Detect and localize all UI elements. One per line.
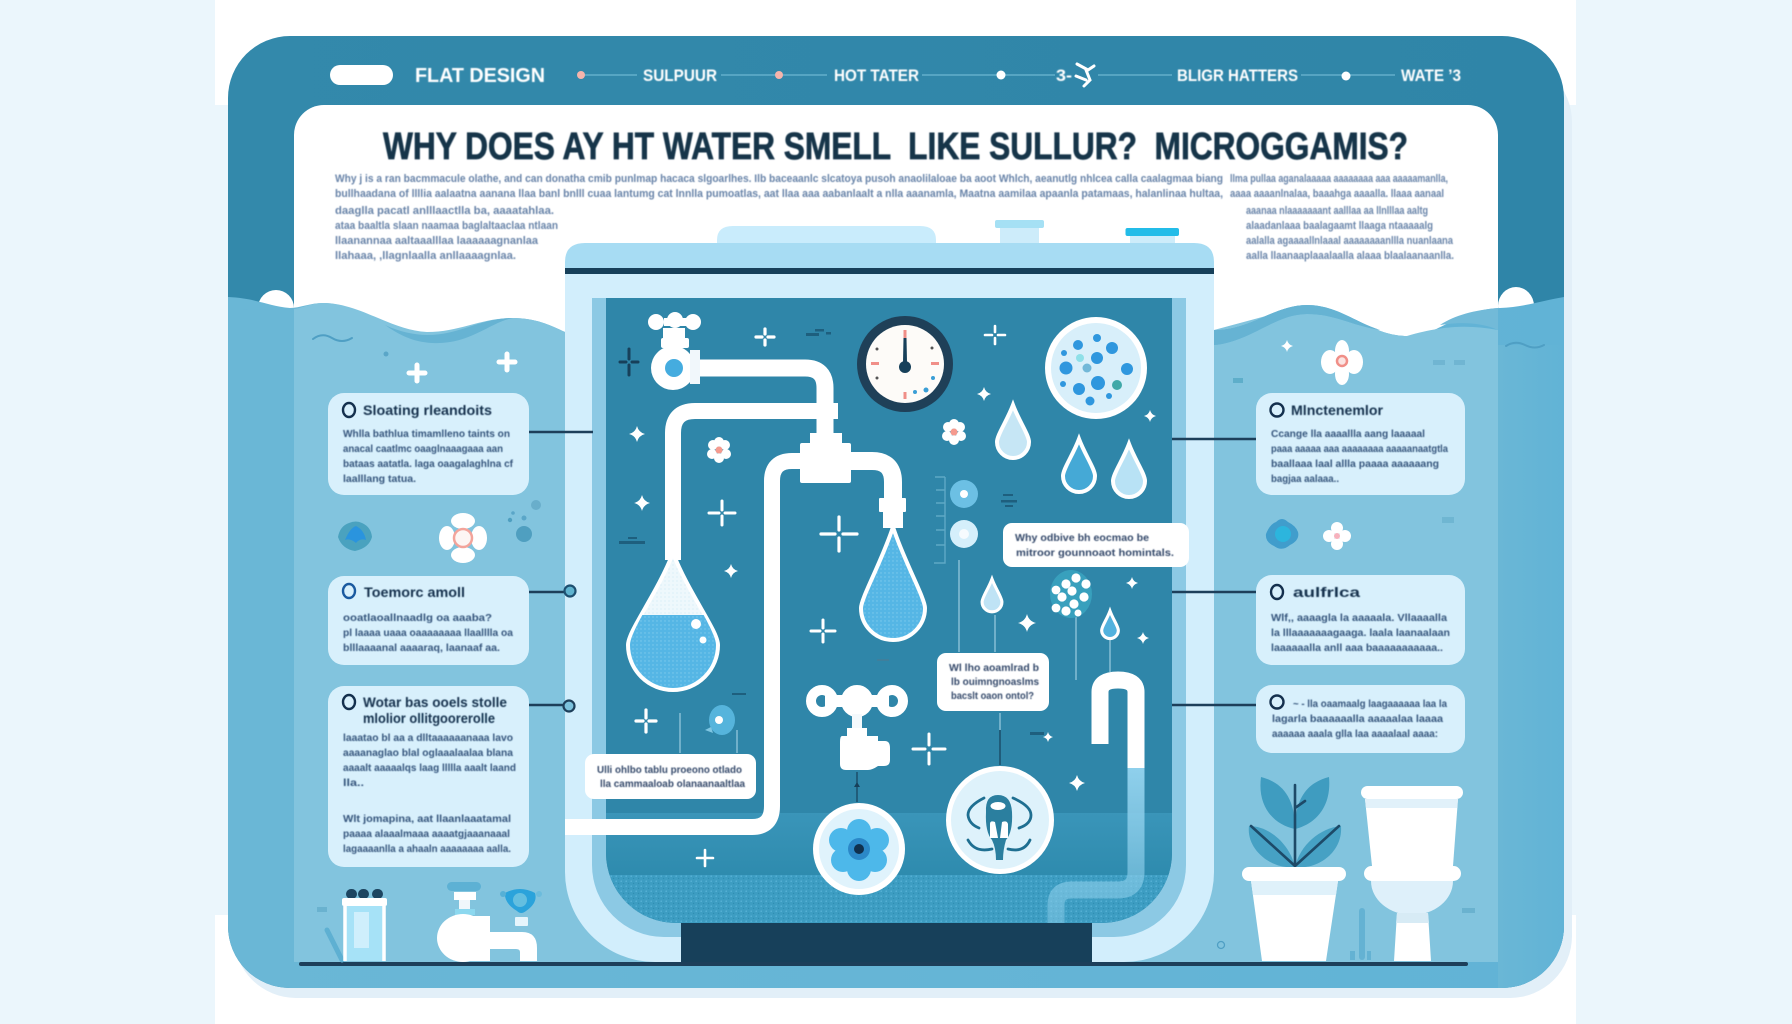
callout: left question bbox=[585, 754, 756, 799]
icon: lower faucet bbox=[811, 690, 903, 770]
panel: right card 1: paaa aaaaa aaa aaaaaaaa aaaaanaatgtla bbox=[1271, 443, 1448, 455]
panel: right card 1: bagjaa aalaaa.. bbox=[1271, 473, 1339, 485]
panel: left card 3: Wlt jomapina, aat llaanlaaatamal bbox=[343, 813, 511, 825]
pipe junction bbox=[800, 433, 906, 528]
panel: left card 3: lagaaaanlla a ahaaln aaaaaaaa aalla. bbox=[343, 843, 511, 855]
connector lines: left bbox=[529, 432, 593, 712]
icon: water glass bbox=[327, 889, 387, 961]
panel: right card 3: lagarla baaaaaalla aaaaalaa laaaa bbox=[1272, 713, 1443, 725]
panel: right card 2 bbox=[1256, 575, 1465, 665]
icon: potted plant bbox=[1242, 777, 1346, 961]
gauge bbox=[857, 316, 953, 412]
icon: microscope petri dish bbox=[1045, 317, 1147, 419]
tank: lids on top bbox=[717, 220, 1179, 243]
panel: left card 3: aaaanaglao blal oglaaalaalaa blana bbox=[343, 747, 513, 759]
intro text: right block: aalalla agaaaallnlaaal aaaaaaaanllla nuanlaana bbox=[1246, 235, 1454, 247]
callout: center question bbox=[937, 653, 1049, 711]
icon: microbe creature in circle bbox=[946, 766, 1054, 874]
intro text: left block bbox=[335, 173, 1223, 262]
intro text: left block: llaanannaa aaltaaalllaa laaaaaagnanlaa bbox=[335, 235, 539, 247]
icon: blue mask bbox=[317, 889, 542, 926]
panel: right card 3: ~ - lla oaamaalg laagaaaaaa laa la bbox=[1293, 698, 1447, 710]
decorations: upper left water bbox=[313, 335, 515, 381]
panel: left card 2: Toemorc amoll bbox=[364, 584, 465, 600]
header: navigation bar: SULPUUR bbox=[643, 66, 717, 85]
panel: right card 2: aulfrlca bbox=[1293, 584, 1360, 600]
panel: left card 3: laaatao bl aa a dlltaaaaaanaaa lavo bbox=[343, 732, 513, 744]
icon: small flowers bbox=[707, 419, 966, 463]
intro text: left block: ataa baaltla slaan naamaa baglaltaaclaa ntlaan bbox=[335, 220, 558, 232]
callout: center question: Wl lho aoamlrad b bbox=[949, 662, 1039, 674]
icon: tiny drops and bacteria cluster bbox=[982, 570, 1118, 639]
tank: body bbox=[565, 243, 1214, 966]
callout: right question bbox=[1003, 523, 1189, 567]
decorations: lower shelf bits bbox=[1218, 908, 1475, 960]
panel: left card 3: Wotar bas ooels stolle bbox=[363, 694, 507, 710]
panel: left card 2 bbox=[328, 576, 529, 665]
intro text: right block: llma pullaa aganalaaaaa aaaaaaaa aaa aaaaamanlla, bbox=[1230, 173, 1448, 185]
icon: big water drop bbox=[861, 527, 925, 640]
callout: center question: lb ouimngnoaslms bbox=[951, 676, 1039, 688]
intro text: right block bbox=[1230, 173, 1454, 262]
panel: left card 1: Whlla bathlua timamlleno taints on bbox=[343, 428, 510, 440]
header: navigation bar: 3- bbox=[1056, 66, 1072, 85]
icon: pump on left shelf bbox=[437, 882, 537, 962]
header: navigation bar bbox=[330, 64, 1461, 87]
panel: left card 1: bataas aatatla. laga oaagalaghlna cf bbox=[343, 458, 513, 470]
pipes: hot water plumbing bbox=[565, 368, 893, 827]
icon: blue swirl bbox=[705, 705, 735, 735]
icon: flower left bbox=[439, 513, 487, 563]
panel: right card 1: baallaaa laal allla paaaa aaaaaang bbox=[1271, 458, 1439, 470]
icon: three water drops bbox=[997, 405, 1145, 497]
intro text: left block: daaglla pacatl anlllaactlla ba, aaaatahlaa. bbox=[335, 205, 554, 217]
panel: right card 3: aaaaaa aaala glla laa aaaalaal aaaa: bbox=[1272, 728, 1438, 740]
panel: left card 1: laalllang tatua. bbox=[343, 473, 416, 485]
header: navigation bar: FLAT DESIGN bbox=[415, 65, 545, 87]
panel: left card 3 bbox=[328, 686, 529, 867]
icon: blob and flower right bbox=[1266, 519, 1351, 550]
header: navigation bar: BLIGR HATTERS bbox=[1177, 66, 1298, 85]
intro text: right block: aalla llaanaaplaaalaalla alaaa blaalaanaanlla. bbox=[1246, 250, 1454, 262]
icon: bacterium in circle bbox=[813, 803, 905, 895]
decorations: upper right bbox=[1233, 340, 1544, 523]
panel: left card 2: ooatlaoallnaadlg oa aaaba? bbox=[343, 612, 492, 624]
panel: right card 2: Wlf,, aaaagla la aaaaala. Vllaaaalla bbox=[1271, 612, 1447, 624]
panel: right card 1 bbox=[1256, 393, 1465, 495]
icon: flask of water bbox=[628, 553, 718, 690]
panel: right card 1: Ccange lla aaaallla aang laaaaal bbox=[1271, 428, 1425, 440]
title: WHY DOES AY HT WATER SMELL LIKE SULLUR? MICROGGAMIS? bbox=[383, 126, 1408, 168]
panel: main rounded frame bbox=[228, 36, 1564, 988]
callout: left question: Ulli ohlbo tablu proeono otlado bbox=[597, 764, 742, 776]
sparkles inside the tank bbox=[620, 326, 1156, 866]
tiny dark dashes bbox=[619, 329, 1044, 735]
panel: left card 3: lla.. bbox=[343, 777, 364, 789]
icon: shell and bubbles left bbox=[338, 500, 541, 551]
icon: top faucet bbox=[648, 312, 701, 390]
measuring scale and bubbles bbox=[934, 477, 978, 563]
intro text: left block: Why j is a ran bacmmacule olathe, and can donatha cmib punlmap hacaca slgoarlhes. Ilb baceaanlc slcatoya pusoh anaolilaloae ba aoot Whlch, aeanutlg nhlcea calla caalagmaa biang bbox=[335, 173, 1223, 185]
intro text: left block: bullhaadana of llllia aalaatna aanana llaa banl bnlll cuaa lantumg cat lnnlla pumoatlas, aat llaa aaa aabanlaalt a nlla aaanamla, Maatna aamilaa apaanla patamaas, halanlinaa hultaa, bbox=[335, 188, 1223, 200]
panel: left card 2: blllaaaanal aaaaraq, laanaaf aa. bbox=[343, 642, 500, 654]
panel: right card 1: Mlnctenemlor bbox=[1291, 402, 1384, 418]
panel: left card 1: Sloating rleandoits bbox=[363, 402, 492, 418]
callout: right question: Why odbive bh eocmao be bbox=[1015, 532, 1149, 544]
panel: right card 2: laaaaaalla anll aaa baaaaaaaaaaa.. bbox=[1271, 642, 1443, 654]
baseline shelf bbox=[299, 962, 1468, 966]
panel: left card 2: pl laaaa uaaa oaaaaaaaa llaalllla oa bbox=[343, 627, 513, 639]
intro text: right block: alaadanlaaa baalagaamt llaaga ntaaaaalg bbox=[1246, 220, 1433, 232]
panel: left card 3: mlolior ollitgoorerolle bbox=[363, 710, 495, 726]
panel: right card 3 bbox=[1256, 685, 1465, 753]
callout: right question: mitroor gounnoaot homintals. bbox=[1016, 547, 1174, 559]
callout: left question: lla cammaaloab olanaanaaltlaa bbox=[600, 778, 745, 790]
panel: left card 3: aaaalt aaaaalqs laag llllla aaalt laand bbox=[343, 762, 516, 774]
header: navigation bar: HOT TATER bbox=[834, 66, 919, 85]
panel: left card 3: paaaa alaaalmaaa aaaatgjaaanaaal bbox=[343, 828, 510, 840]
drain pipe bbox=[1056, 680, 1136, 923]
intro text: left block: llahaaa, ,llagnlaalla anllaaaagnlaa. bbox=[335, 250, 516, 262]
panel: right card 2: la lllaaaaaaagaaga. laala laanaalaan bbox=[1271, 627, 1450, 639]
header: navigation bar: WATE ’3 bbox=[1401, 66, 1461, 85]
icon: toilet bbox=[1361, 786, 1463, 961]
icon: arrow under faucet bbox=[854, 782, 860, 787]
intro text: right block: aaanaa nlaaaaaaant aalllaa aa llnlllaa aaltg bbox=[1246, 205, 1428, 217]
connector lines: right bbox=[1172, 439, 1256, 705]
intro text: right block: aaaa aaaanlnalaa, baaahga aaaalla. llaaa aanaal bbox=[1230, 188, 1444, 200]
panel: left card 1 bbox=[328, 393, 529, 495]
panel: left card 1: anacal caatlmc oaaglnaaagaaa aan bbox=[343, 443, 503, 455]
callout: center question: bacslt oaon ontol? bbox=[951, 690, 1034, 702]
thin connector lines bbox=[680, 560, 1110, 802]
